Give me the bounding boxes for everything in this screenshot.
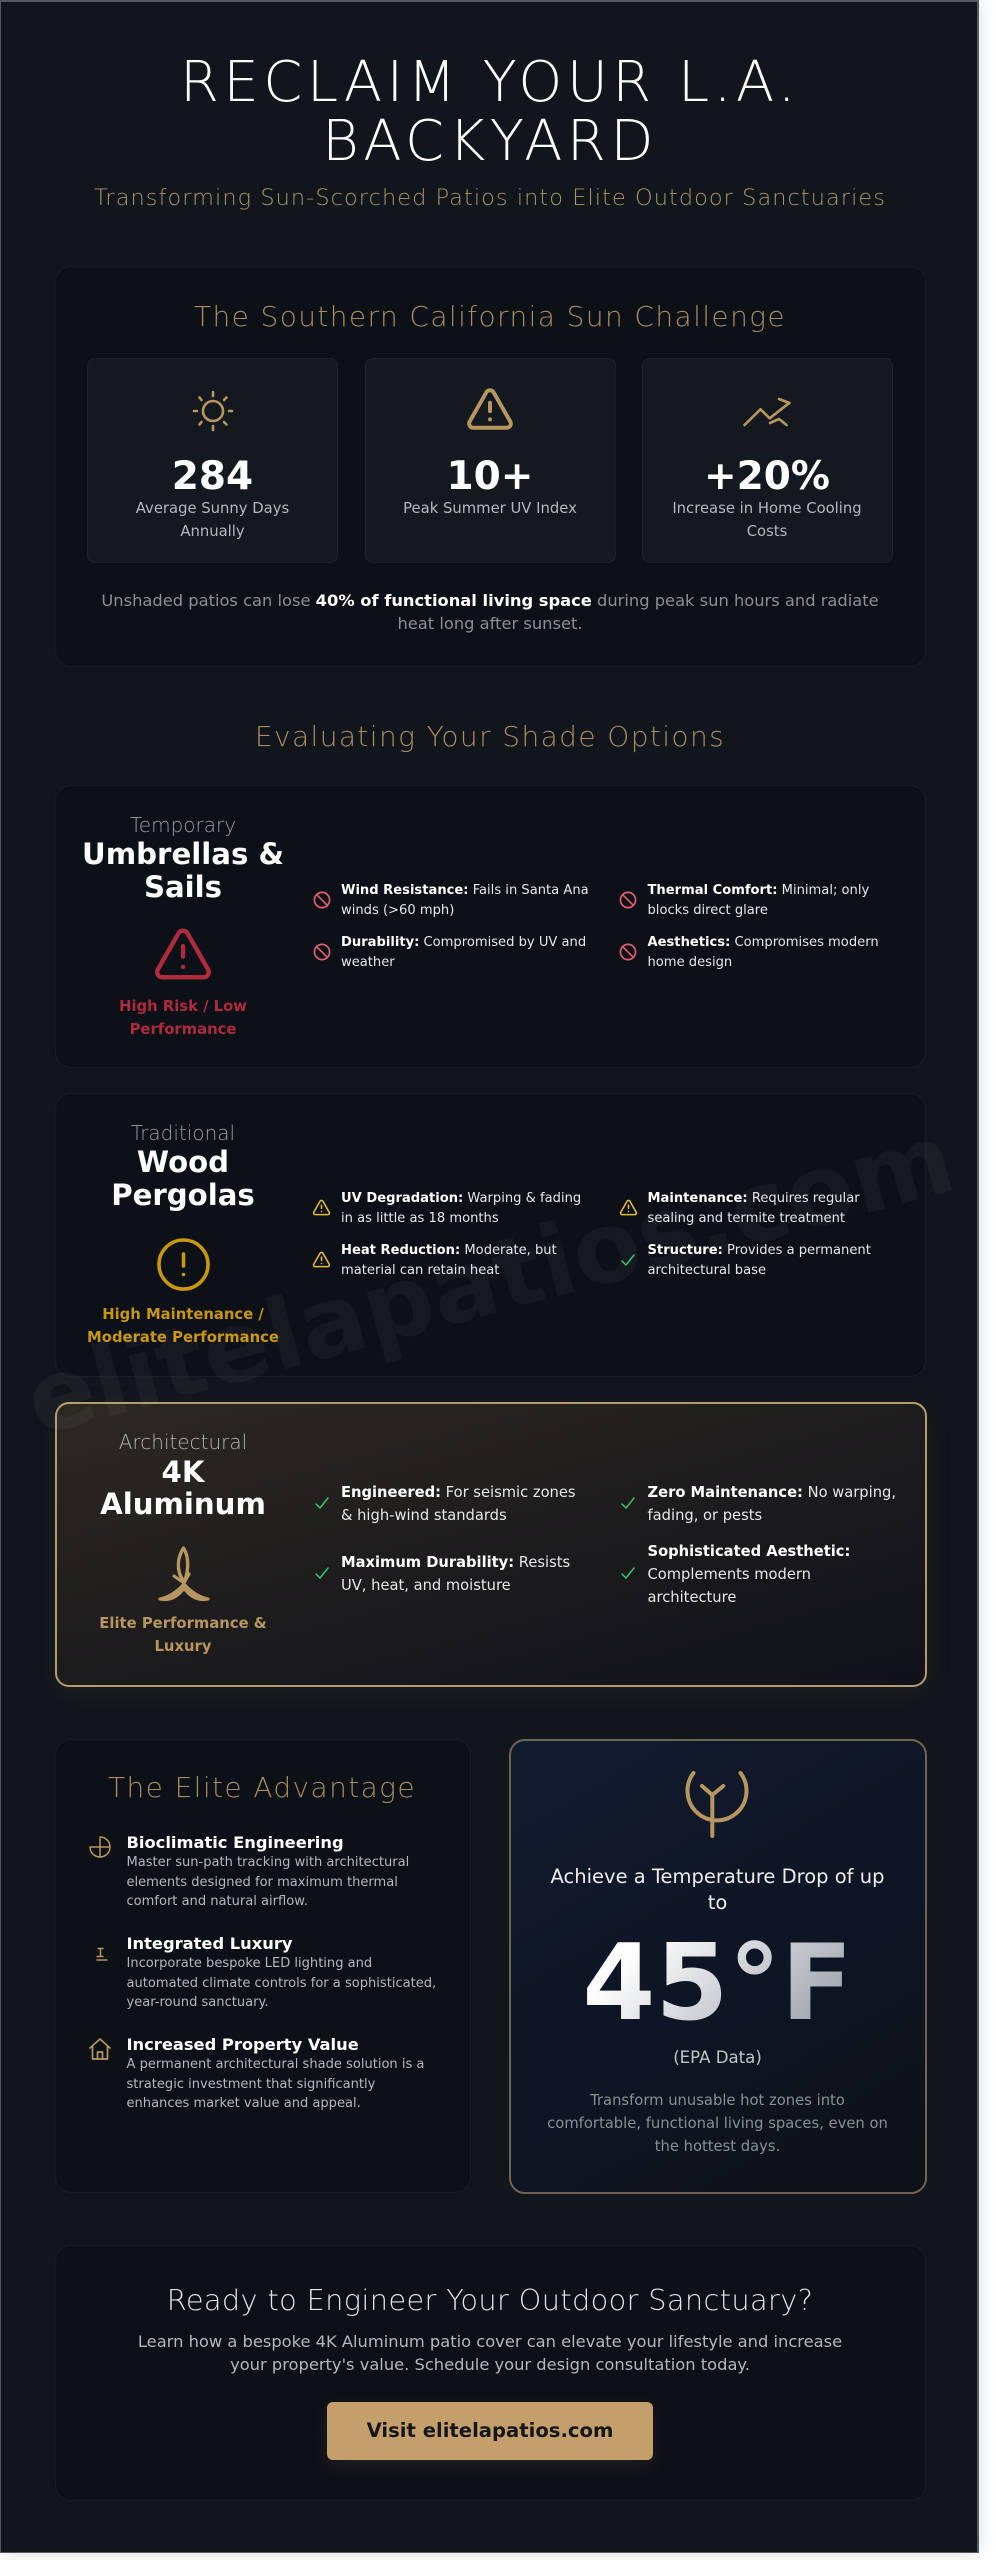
feature: engineered xyxy=(341,1484,576,1524)
stat card: cooling costs xyxy=(642,358,893,563)
panel: temperature drop xyxy=(509,1739,927,2194)
advantage: bioclimatic engineering: Master sun-path tracking with architectural xyxy=(126,1855,409,1870)
paragraph: lost living space: Unshaded patios can lose 40% of functional living space during peak sun hours and radiate xyxy=(101,590,879,610)
heading: shade options: Evaluating Your Shade Options xyxy=(255,720,725,753)
stat: 10+: 10+ xyxy=(447,454,533,499)
feature: zero maintenance: Zero Maintenance: No warping, xyxy=(648,1484,896,1501)
advantage: integrated luxury: year-round sanctuary. xyxy=(126,1995,268,2010)
feature: wind resistance: winds (>60 mph) xyxy=(341,903,454,918)
stat card: sunny days xyxy=(87,358,338,563)
kicker: architectural: Architectural xyxy=(119,1430,247,1454)
feature: uv degradation: in as little as 18 months xyxy=(341,1211,499,1226)
button: visit website xyxy=(327,2402,653,2460)
text: temperature drop description: the hottest days. xyxy=(655,2138,780,2154)
title: BACKYARD xyxy=(322,109,658,174)
stat label: uv index: Peak Summer UV Index xyxy=(403,500,577,517)
panel: sun challenge xyxy=(54,266,926,667)
icon: check xyxy=(315,1567,329,1579)
kicker: traditional: Traditional xyxy=(131,1121,235,1145)
stat label: sunny days xyxy=(136,500,289,540)
text: temperature drop description xyxy=(547,2088,888,2158)
panel: wood pergolas xyxy=(54,1093,926,1377)
feature: durability: Durability: Compromised by UV and xyxy=(341,935,586,950)
rating: high maintenance xyxy=(87,1306,279,1346)
icon: house xyxy=(88,2037,112,2061)
advantage: bioclimatic engineering xyxy=(126,1833,456,1912)
stat label: cooling costs: Increase in Home Cooling xyxy=(672,500,862,517)
stat: 284: 284 xyxy=(172,454,253,499)
rating: high risk: Performance xyxy=(130,1020,236,1038)
icon: ban xyxy=(620,944,636,960)
text: temperature drop lead-in: Achieve a Temperature Drop of up xyxy=(551,1865,884,1888)
name: wood pergolas: Wood xyxy=(137,1145,229,1179)
stat label: sunny days: Annually xyxy=(180,523,245,540)
icon: ban xyxy=(314,892,330,908)
feature: aesthetics: Aesthetics: Compromises modern xyxy=(648,935,879,950)
feature: structure: Structure: Provides a permanent xyxy=(648,1243,871,1258)
heading: elite advantage: The Elite Advantage xyxy=(108,1771,416,1804)
rating: high risk xyxy=(119,998,247,1038)
stat: +20%: +20% xyxy=(704,454,830,499)
icon: check xyxy=(621,1567,635,1579)
feature: thermal comfort: Thermal Comfort: Minimal; only xyxy=(648,883,869,898)
advantage: increased property value xyxy=(126,2035,456,2114)
text: temperature drop description: Transform unusable hot zones into xyxy=(590,2092,845,2108)
title xyxy=(180,50,800,174)
feature: maximum durability: UV, heat, and moisture xyxy=(341,1577,511,1594)
panel: umbrellas and sails xyxy=(54,785,926,1068)
name: umbrellas and sails xyxy=(82,837,284,904)
text: call to action description xyxy=(138,2330,842,2376)
feature: engineered: & high-wind standards xyxy=(341,1507,507,1524)
feature: thermal comfort xyxy=(648,883,869,918)
icon: warning triangle xyxy=(467,388,513,430)
advantage: bioclimatic engineering: Bioclimatic Engineering xyxy=(126,1833,344,1852)
icon: bioclimatic sun path xyxy=(89,1836,111,1858)
paragraph: lost living space: heat long after sunset. xyxy=(397,614,583,632)
rating: elite performance: Elite Performance & xyxy=(99,1615,267,1632)
name: umbrellas and sails: Umbrellas & xyxy=(82,837,284,871)
feature: sophisticated aesthetic: architecture xyxy=(648,1589,736,1606)
name: umbrellas and sails: Sails xyxy=(144,870,222,904)
rating: elite performance xyxy=(99,1615,267,1655)
panel: elite advantage xyxy=(54,1739,470,2193)
stat label: cooling costs: Costs xyxy=(747,523,787,540)
icon: small warning xyxy=(312,1200,330,1216)
subtitle: Transforming Sun-Scorched Patios into Elite Outdoor Sanctuaries xyxy=(94,185,886,211)
icon: three-blade fan xyxy=(158,1546,210,1602)
name: wood pergolas: Pergolas xyxy=(111,1178,255,1212)
title: RECLAIM YOUR L.A. xyxy=(180,50,800,115)
icon: small warning xyxy=(312,1252,330,1268)
feature: wind resistance xyxy=(341,883,589,918)
panel: 4k aluminum xyxy=(54,1402,926,1687)
icon: small warning xyxy=(620,1200,638,1216)
kicker: temporary: Temporary xyxy=(130,813,236,837)
advantage: integrated luxury xyxy=(126,1934,456,2013)
feature: durability xyxy=(341,935,586,970)
feature: heat reduction xyxy=(341,1243,557,1278)
rating: elite performance: Luxury xyxy=(155,1638,211,1655)
text: EPA data: (EPA Data) xyxy=(673,2048,762,2067)
heading: call to action: Ready to Engineer Your Outdoor Sanctuary? xyxy=(167,2283,813,2317)
advantage: integrated luxury: Integrated Luxury xyxy=(126,1934,292,1953)
icon: ban xyxy=(314,944,330,960)
panel: call to action xyxy=(54,2245,926,2501)
feature: maximum durability: Maximum Durability: Resists xyxy=(341,1554,570,1571)
watermark: elitelapatios.com xyxy=(15,1102,965,1458)
rating: high risk: High Risk / Low xyxy=(119,998,247,1014)
icon: sun xyxy=(192,390,234,432)
icon: tree in arc xyxy=(680,1768,756,1840)
icon: check xyxy=(621,1497,635,1509)
paragraph: lost living space xyxy=(101,590,879,632)
name: 4k aluminum: Aluminum xyxy=(100,1487,266,1521)
feature: uv degradation xyxy=(341,1191,581,1226)
icon: red warning triangle xyxy=(154,928,212,980)
feature: aesthetics: home design xyxy=(648,955,732,970)
text: temperature drop lead-in xyxy=(551,1864,884,1916)
feature: sophisticated aesthetic xyxy=(648,1543,850,1606)
advantage: integrated luxury: automated climate controls for a sophisticated, xyxy=(126,1976,436,1991)
advantage: increased property value: strategic investment that significantly xyxy=(126,2077,375,2092)
feature: maintenance: sealing and termite treatment xyxy=(648,1211,845,1226)
name: wood pergolas xyxy=(111,1145,255,1212)
icon: integrated luxury lamp xyxy=(96,1947,108,1961)
feature: maximum durability xyxy=(341,1554,570,1594)
icon: trend up xyxy=(743,398,791,426)
feature: heat reduction: Heat Reduction: Moderate, but xyxy=(341,1243,557,1258)
feature: sophisticated aesthetic: Complements modern xyxy=(648,1566,811,1583)
heading: sun challenge: The Southern California Sun Challenge xyxy=(194,300,786,333)
advantage: integrated luxury: Incorporate bespoke LED lighting and xyxy=(126,1956,372,1971)
feature: structure xyxy=(648,1243,871,1278)
rating: high maintenance: Moderate Performance xyxy=(87,1329,279,1346)
stat label: sunny days: Average Sunny Days xyxy=(136,500,289,517)
text: call to action description: Learn how a bespoke 4K Aluminum patio cover can elevate your lifestyle and increase xyxy=(138,2332,842,2350)
advantage: increased property value: A permanent architectural shade solution is a xyxy=(126,2057,424,2072)
feature: heat reduction: material can retain heat xyxy=(341,1263,499,1278)
feature: uv degradation: UV Degradation: Warping & fading xyxy=(341,1191,581,1206)
feature: zero maintenance xyxy=(648,1484,896,1524)
icon: check xyxy=(315,1497,329,1509)
button: visit website: Visit elitelapatios.com xyxy=(367,2419,613,2442)
feature: sophisticated aesthetic: Sophisticated Aesthetic: xyxy=(648,1543,850,1560)
feature: durability: weather xyxy=(341,955,395,970)
text: temperature drop description: comfortable, functional living spaces, even on xyxy=(547,2114,888,2132)
rating: high maintenance: High Maintenance / xyxy=(102,1306,264,1323)
advantage: increased property value: enhances market value and appeal. xyxy=(126,2096,361,2111)
feature: zero maintenance: fading, or pests xyxy=(648,1507,762,1524)
name: 4k aluminum: 4K xyxy=(162,1455,204,1489)
advantage: bioclimatic engineering: elements designed for maximum thermal xyxy=(126,1875,398,1890)
feature: structure: architectural base xyxy=(648,1263,766,1278)
icon: check xyxy=(621,1254,635,1266)
icon: amber alert circle xyxy=(157,1238,210,1291)
icon: ban xyxy=(620,892,636,908)
advantage: bioclimatic engineering: comfort and natural airflow. xyxy=(126,1894,308,1909)
feature: thermal comfort: blocks direct glare xyxy=(648,903,768,918)
feature: aesthetics xyxy=(648,935,879,970)
feature: engineered: Engineered: For seismic zones xyxy=(341,1484,576,1501)
feature: maintenance xyxy=(648,1191,860,1226)
stat card: uv index xyxy=(365,358,616,563)
feature: maintenance: Maintenance: Requires regular xyxy=(648,1191,860,1206)
text: temperature drop lead-in: to xyxy=(708,1891,727,1914)
advantage: increased property value: Increased Property Value xyxy=(126,2035,359,2054)
text: call to action description: your property's value. Schedule your design consultation today. xyxy=(230,2354,750,2374)
big number: 45 degrees F: 45°F xyxy=(582,1922,853,2044)
stat label: cooling costs xyxy=(672,500,862,540)
name: 4k aluminum xyxy=(100,1455,266,1521)
feature: wind resistance: Wind Resistance: Fails in Santa Ana xyxy=(341,883,589,898)
